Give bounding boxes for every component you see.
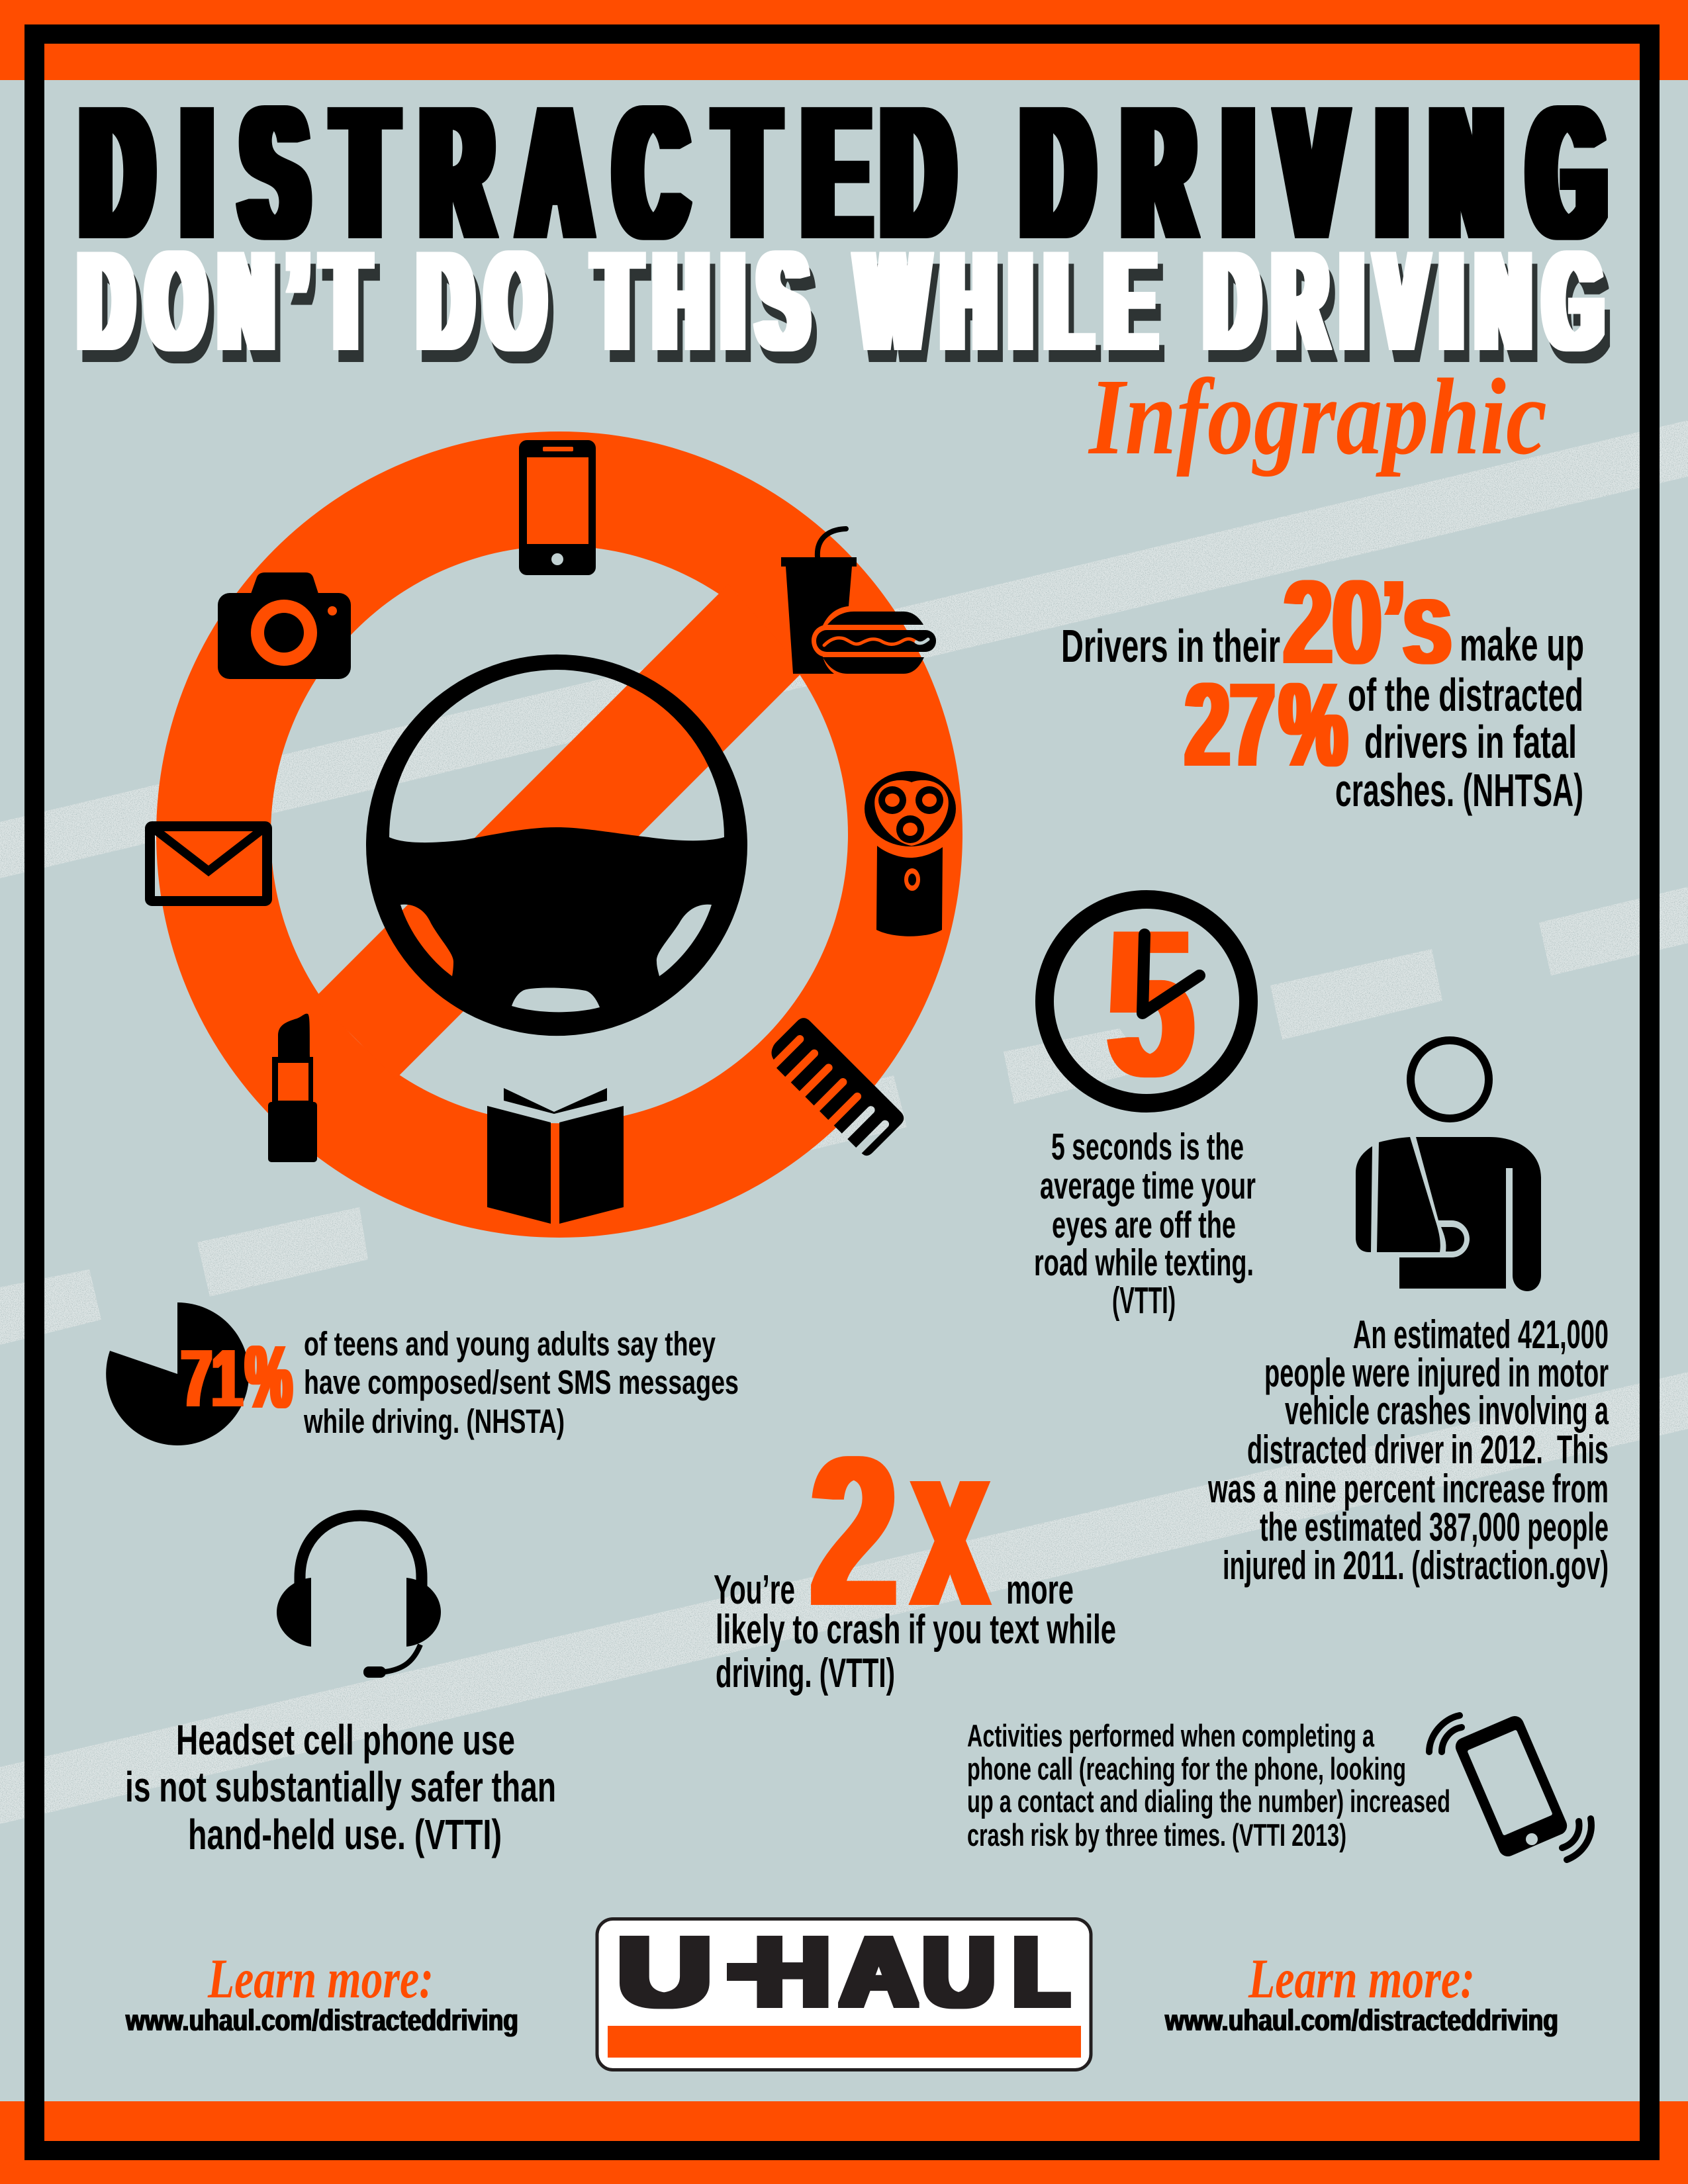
stat: 5 seconds clock	[1034, 886, 1256, 1322]
5 seconds caption	[1034, 1126, 1256, 1322]
headset caption: hand-held use. (VTTI)	[188, 1811, 502, 1858]
stat: 71 percent of teens	[106, 1302, 739, 1445]
prohibition ring and bar	[156, 432, 962, 1238]
infographic script label: Infographic	[1088, 356, 1547, 477]
5 seconds caption: 5 seconds is the	[1051, 1126, 1244, 1168]
learn more left: www.uhaul.com/distracteddriving	[125, 2003, 518, 2037]
more text: more	[1006, 1567, 1074, 1613]
5 seconds caption: eyes are off the	[1052, 1204, 1236, 1246]
logo wordmark: H	[755, 1918, 830, 2026]
logo wordmark: U	[923, 1918, 995, 2026]
big number 2x: x	[913, 1394, 988, 1655]
icon: vibrating phone	[1429, 1713, 1591, 1860]
teens caption: have composed/sent SMS messages	[304, 1363, 739, 1401]
icon: camera	[218, 572, 351, 679]
teens caption: of teens and young adults say they	[304, 1325, 716, 1363]
stat: phone call activities	[967, 1713, 1591, 1860]
activities text	[967, 1718, 1450, 1852]
logo wordmark: -	[735, 1909, 755, 2018]
big number 2x	[811, 1394, 988, 1655]
activities text: Activities performed when completing a	[967, 1718, 1375, 1753]
road lane markings	[0, 420, 1688, 1824]
5 seconds caption: road while texting.	[1034, 1242, 1254, 1284]
big number 71 percent: %	[246, 1327, 292, 1427]
big number 71 percent: 71	[181, 1334, 242, 1424]
teens caption: while driving. (NHSTA)	[303, 1402, 565, 1440]
logo wordmark: U	[617, 1918, 712, 2026]
big number 27 percent: 27	[1185, 659, 1275, 792]
panel: prohibition sign with distractions	[150, 432, 962, 1238]
icon: person with arm sling	[1356, 1040, 1541, 1291]
driving source line: driving. (VTTI)	[716, 1651, 895, 1696]
logo wordmark	[617, 1909, 1068, 2026]
drivers in fatal line: drivers in fatal	[1364, 716, 1577, 768]
icon: headset	[277, 1516, 441, 1678]
injury statistic text	[1207, 1312, 1609, 1588]
activities text: crash risk by three times. (VTTI 2013)	[967, 1817, 1346, 1852]
stat: injured person	[1207, 1040, 1609, 1588]
icon: electric shaver	[865, 771, 956, 936]
logo orange stripe	[608, 2026, 1081, 2058]
5 seconds caption: average time your	[1040, 1165, 1256, 1207]
you're text: You’re	[714, 1567, 795, 1613]
icon: clock	[1045, 899, 1248, 1103]
learn more right: www.uhaul.com/distracteddriving	[1164, 2003, 1558, 2037]
big number 2x: 2	[811, 1413, 897, 1651]
big number 5: 5	[1107, 886, 1194, 1120]
stat: headset	[125, 1516, 556, 1858]
make up line: make up	[1460, 619, 1584, 670]
learn more left	[125, 1948, 518, 2037]
headset caption	[125, 1716, 556, 1858]
headset caption: is not substantially safer than	[125, 1763, 556, 1811]
5 seconds caption: (VTTI)	[1112, 1279, 1176, 1322]
icon: pie chart	[106, 1302, 249, 1445]
icon: open book	[487, 1088, 624, 1224]
learn more right	[1164, 1948, 1558, 2037]
learn more left: Learn more:	[207, 1948, 434, 2010]
icon: drink and hot dog	[781, 529, 936, 674]
stat: twice as likely	[714, 1394, 1116, 1696]
top orange band	[0, 0, 1688, 80]
big number 20's: 20’s	[1284, 556, 1452, 689]
logo hyphen bar	[727, 1963, 760, 1981]
headset caption: Headset cell phone use	[176, 1716, 515, 1764]
logo wordmark: A	[841, 1918, 917, 2026]
teens caption	[303, 1325, 739, 1440]
subtitle: don't do this while driving: DON’T DO THIS WHILE DRIVING	[79, 222, 1602, 379]
stat: drivers in their 20's	[1061, 556, 1584, 816]
steering wheel	[366, 655, 747, 1036]
activities text: up a contact and dialing the number) increased	[967, 1784, 1450, 1819]
icon: envelope	[150, 826, 267, 901]
big number 27 percent: %	[1280, 659, 1347, 792]
icon: smartphone	[519, 440, 596, 575]
learn more right: Learn more:	[1248, 1948, 1475, 2010]
icon: lipstick	[268, 1014, 317, 1162]
logo: u-haul	[597, 1909, 1091, 2070]
title: distracted driving: DISTRACTED DRIVING	[83, 67, 1604, 278]
prohibition diagonal bar	[314, 584, 804, 1079]
logo wordmark: L	[1013, 1918, 1068, 2026]
crash text line: likely to crash if you text while	[716, 1607, 1116, 1653]
bottom orange band	[0, 2101, 1688, 2184]
icon: comb	[763, 1015, 907, 1158]
activities text: phone call (reaching for the phone, looking	[967, 1751, 1406, 1786]
drivers in their line: Drivers in their	[1061, 620, 1280, 672]
